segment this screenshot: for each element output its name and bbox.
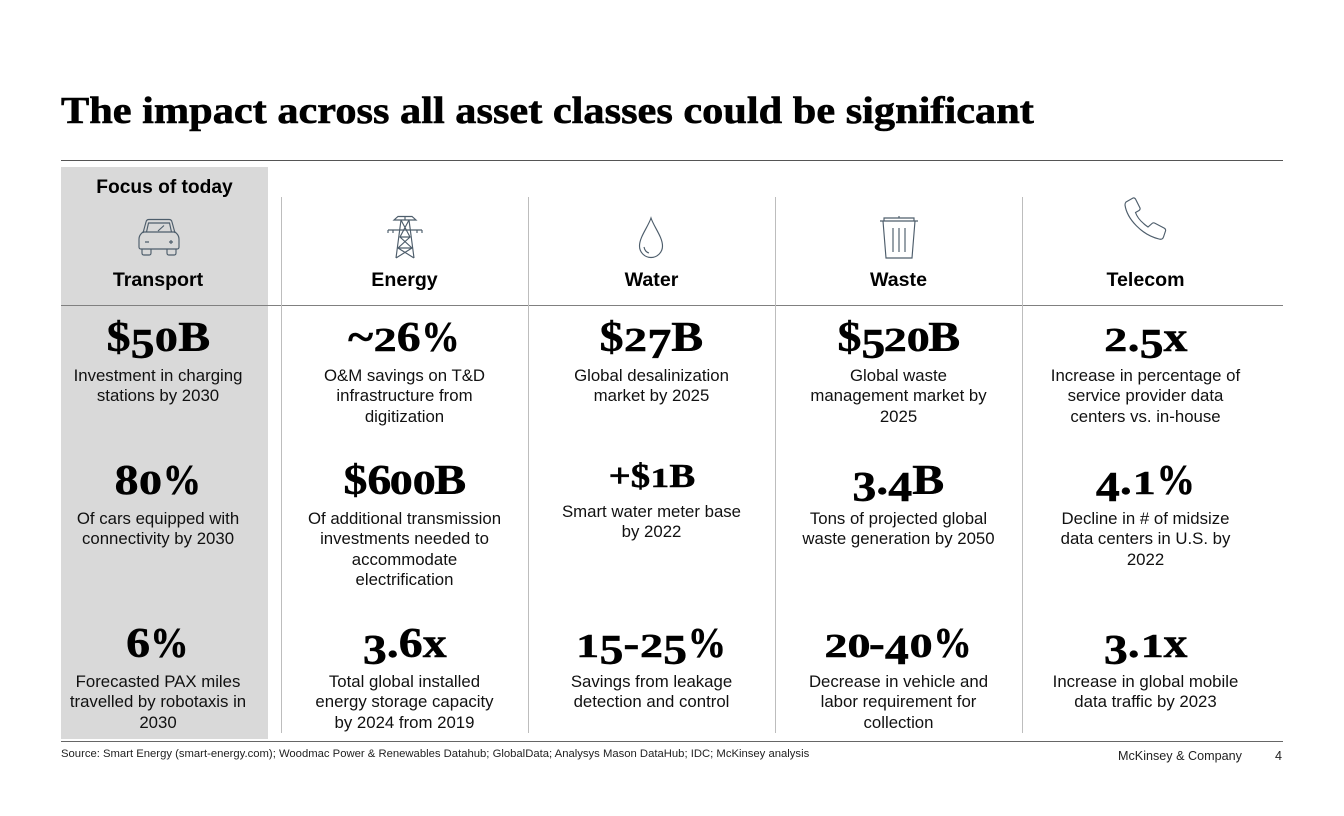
stat: 20-40% [824,621,971,674]
text: stat 2 [802,509,995,548]
text: stat 1: Investment in charging [74,366,242,385]
text: stat 1 [574,366,729,405]
heading: transport: Transport [113,269,203,291]
stat: ~26% [348,315,460,361]
text: stat 3: Total global installed [329,672,480,691]
text: stat 3 [809,672,988,732]
stat: 20-40%: -4 [868,621,908,674]
text: stat 1: Global waste [850,366,947,385]
stat: 80%: 0 [139,465,162,502]
text: stat 1 [810,366,987,426]
stat: ~26%: 2 [374,322,397,359]
text: stat 2: connectivity by 2030 [82,529,234,548]
stat: 15-25% [577,621,726,674]
text: stat 3: Forecasted PAX miles [76,672,240,691]
text: stat 2 [308,509,501,589]
stat: 50B: $5 B [106,315,210,368]
text: stat 1: Global desalinization [574,366,729,385]
stat: 20-40%: % [933,621,971,667]
text: stat 1: 2025 [880,406,917,426]
text: stat 3: by 2024 from 2019 [335,712,474,732]
stat: 15-25%: 5- 5 [600,621,688,674]
text: stat 2: Smart water meter base [562,502,741,521]
text: stat 2 [1061,509,1230,568]
stat: ~26%: ~ 6 [349,315,421,361]
text: stat 3: data traffic by 2023 [1074,692,1217,711]
text: stat 3: Decrease in vehicle and [809,672,988,691]
heading: energy: Energy [371,269,438,291]
stat: 4.1%: 4. [1096,458,1132,511]
stat: 6% [126,621,189,667]
stat: 3.1x: 3. x [1104,621,1187,674]
panel: transport column [70,177,246,732]
text: stat 2: accommodate [352,550,457,568]
icon: telephone [1124,197,1166,240]
stat: $520B: $5 B [837,315,960,368]
text: stat 1 [1051,366,1240,426]
stat: $27B: $ 7B [600,315,703,368]
text: stat 2: Of additional transmission [308,509,501,528]
stat: 2.5x: 2 [1104,322,1127,359]
text: stat 3 [70,672,246,732]
stat: 3.4B: 3.4B [853,458,944,511]
text: stat 1: stations by 2030 [97,386,219,405]
text: stat 2: investments needed to [320,529,489,548]
stat: 3.1x: 1 [1140,628,1163,665]
text: stat 3: Savings from leakage [571,672,732,691]
stat: 4.1%: 1 [1132,465,1155,502]
stat: 80%: % [163,458,201,504]
title: The impact across all asset classes could be significant [61,90,1034,132]
text: stat 3 [315,672,494,732]
text: stat 3: collection [864,712,933,732]
text: stat 3: energy storage capacity [315,692,494,711]
stat: +$1B: 1 [650,463,669,493]
heading: water: Water [625,269,678,291]
stat: 50B: 0 [154,322,177,359]
text: stat 3: travelled by robotaxis in [70,692,246,711]
text: stat 3: labor requirement for [821,692,976,711]
heading: waste: Waste [870,269,927,291]
text: stat 2: data centers in U.S. by [1061,529,1230,548]
page number: 4 [1275,749,1282,763]
stat: 2.5x: .5x [1127,315,1187,368]
stat: +$1B: +$ B [608,458,695,495]
panel: transport focus background [61,167,268,739]
text: stat 2: Tons of projected global [810,509,987,528]
stat: $600B: 00 [390,465,435,502]
stat: 15-25%: % [688,621,726,667]
text: stat 2: 2022 [1127,550,1164,568]
text: stat 3: 2030 [139,712,177,732]
text: stat 3 [571,672,732,711]
icon: waste bin [880,216,918,259]
stat: 6%: 6 [126,621,150,667]
icon: water drop [638,216,664,258]
focus label: Focus of today [96,177,233,198]
stat: 20-40%: 0 [909,628,932,665]
panel: water column [562,216,741,711]
text: stat 1: digitization [365,406,444,426]
panel: telecom column [1051,197,1240,711]
panel: energy column [308,216,501,732]
text: stat 1: Increase in percentage of [1051,366,1240,385]
text: stat 2: Decline in # of midsize [1062,509,1229,528]
text: stat 1: service provider data [1068,386,1223,405]
text: stat 2 [77,509,239,548]
text: stat 2: by 2022 [622,522,681,541]
stat: 3.6x: 3.6x [363,621,446,674]
text: stat 1: management market by [810,386,987,405]
icon: transmission tower [387,216,423,258]
icon: car [138,218,180,256]
stat: $520B: 20 [884,322,929,359]
stat: 4.1% [1096,458,1194,511]
text: stat 2: electrification [356,570,453,589]
text: stat 3 [1053,672,1238,711]
text: stat 3: Increase in global mobile [1053,672,1238,691]
text: stat 3: detection and control [574,692,729,711]
stat: $27B: 2 [624,322,647,359]
text: stat 1 [74,366,242,405]
source note: Source: Smart Energy (smart-energy.com); Woodmac Power & Renewables Datahub; GlobalData; Analysys Mason DataHub; IDC; McKinsey analysis [61,748,809,760]
stat: ~26%: % [422,315,460,361]
text: stat 1: infrastructure from [336,386,473,405]
company name: McKinsey & Company [1118,749,1242,763]
text: stat 2 [562,502,741,541]
heading: telecom: Telecom [1106,269,1185,291]
stat: 80%: 8 [115,458,138,504]
stat: 80% [115,458,201,504]
stat: 15-25%: 1 [577,628,600,665]
stat: 15-25%: 2 [640,628,663,665]
panel: waste column [802,216,995,732]
text: stat 1: centers vs. in-house [1070,406,1221,426]
stat: 4.1%: % [1156,458,1194,504]
text: stat 1 [324,366,485,426]
stat: 6%: % [151,621,189,667]
stat: $600B: $6 B [343,458,466,504]
text: stat 2: waste generation by 2050 [802,529,995,548]
text: stat 2: Of cars equipped with [77,509,239,528]
text: stat 1: market by 2025 [594,386,709,405]
text: stat 1: O&M savings on T&D [324,366,485,385]
stat: 20-40%: 20 [824,628,870,665]
